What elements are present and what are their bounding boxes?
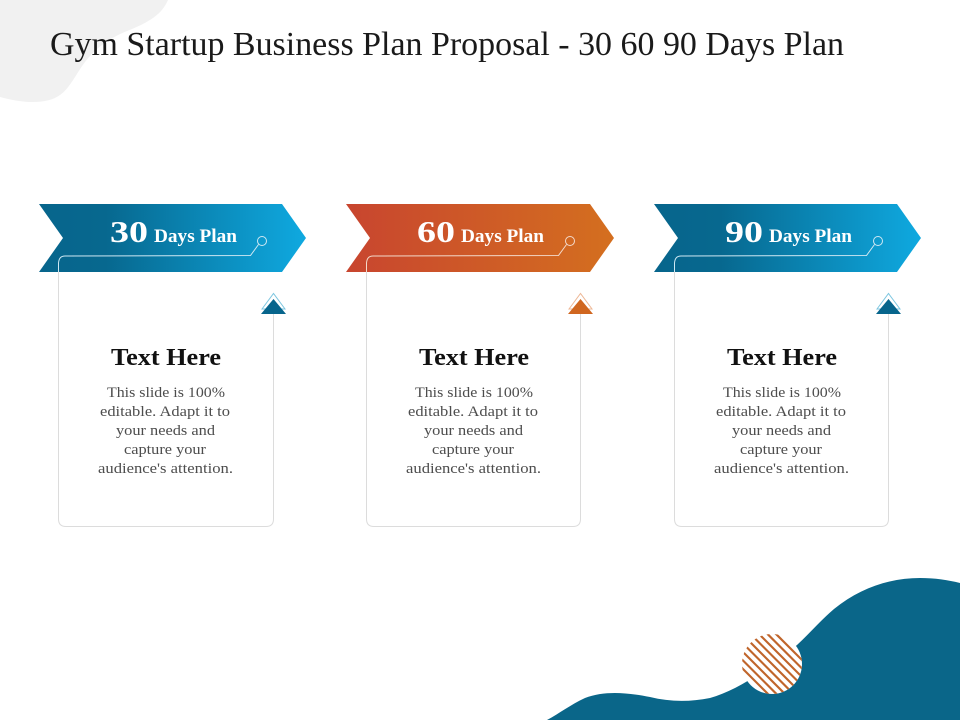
panel: 60 days plan (346, 204, 614, 526)
banner label: 90 Days Plan: Days Plan (769, 226, 852, 247)
card body text: capture your (124, 442, 206, 458)
card body text: editable. Adapt it to (408, 404, 538, 420)
card body text: This slide is 100% (415, 385, 533, 401)
background blob: top-left grey (0, 0, 168, 102)
card body text: This slide is 100% (107, 385, 225, 401)
decorative striped circle (742, 634, 802, 694)
card body text: audience's attention. (406, 461, 541, 477)
card heading: Text Here (419, 345, 529, 371)
banner label: 30 Days Plan: Days Plan (154, 226, 237, 247)
card body text: audience's attention. (98, 461, 233, 477)
card body text: your needs and (424, 423, 524, 439)
card body text (714, 385, 849, 477)
card body text: your needs and (732, 423, 832, 439)
card body text: editable. Adapt it to (716, 404, 846, 420)
connector node (874, 236, 882, 246)
arrowhead (568, 294, 593, 314)
arrowhead (876, 294, 901, 314)
banner: 30 days (39, 204, 306, 272)
card body text (406, 385, 541, 477)
banner label: 60 Days Plan: Days Plan (461, 226, 544, 247)
card body text: your needs and (116, 423, 216, 439)
card body text: capture your (740, 442, 822, 458)
banner label: 90 Days Plan (725, 214, 852, 249)
card body text: audience's attention. (714, 461, 849, 477)
banner label: 30 Days Plan: 30 (110, 214, 148, 249)
title: Gym Startup Business Plan Proposal - 30 60 90 Days Plan (50, 26, 844, 63)
banner label: 60 Days Plan (417, 214, 544, 249)
banner label: 60 Days Plan: 60 (417, 214, 455, 249)
connector highlight (674, 244, 874, 272)
card body text: editable. Adapt it to (100, 404, 230, 420)
banner: 90 days (654, 204, 921, 272)
connector highlight (58, 244, 258, 272)
card outline (58, 272, 274, 526)
card body text: This slide is 100% (723, 385, 841, 401)
card outline (366, 272, 580, 526)
banner label: 30 Days Plan (110, 214, 237, 249)
panel: 90 days plan (654, 204, 921, 526)
connector highlight (366, 244, 566, 272)
arrowhead (261, 294, 286, 314)
banner: 60 days (346, 204, 614, 272)
card body text: capture your (432, 442, 514, 458)
background wave: bottom-right teal (547, 578, 960, 720)
card heading: Text Here (727, 345, 837, 371)
card outline (674, 272, 888, 526)
connector node (566, 236, 574, 246)
card body text (98, 385, 233, 477)
card heading: Text Here (111, 345, 221, 371)
connector node (258, 236, 266, 246)
panel: 30 days plan (39, 204, 306, 526)
banner label: 90 Days Plan: 90 (725, 214, 763, 249)
